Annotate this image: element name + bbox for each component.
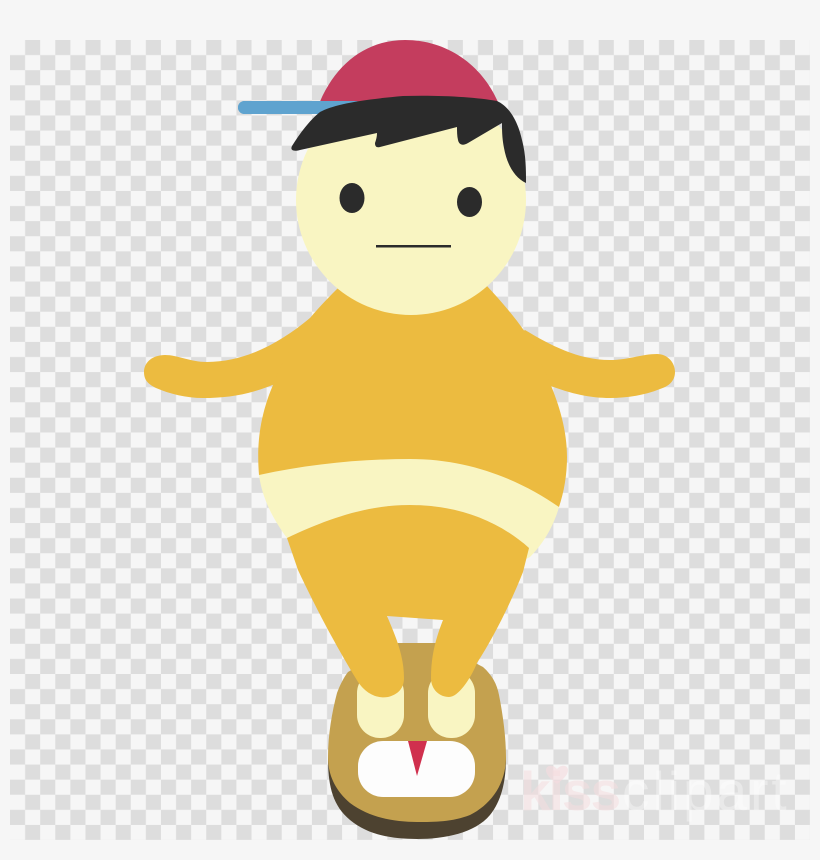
scale dial	[358, 741, 475, 797]
belt	[259, 459, 559, 560]
right eye	[457, 187, 482, 217]
head	[296, 85, 526, 315]
scale base shadow	[328, 757, 506, 839]
watermark: clipart: clipart	[622, 760, 790, 822]
left arm	[144, 318, 320, 398]
hair	[291, 96, 526, 183]
torso	[258, 286, 567, 507]
right arm	[510, 330, 675, 398]
right foot	[428, 670, 475, 738]
scale top	[328, 643, 506, 822]
scale	[328, 643, 506, 839]
mouth	[376, 245, 451, 248]
cap visor	[238, 101, 368, 114]
visor front	[238, 101, 358, 114]
left eye	[340, 183, 364, 213]
watermark: heart	[546, 766, 568, 784]
watermark: kiss: kiss	[520, 760, 619, 822]
scale needle	[408, 741, 427, 776]
legs	[287, 505, 529, 697]
watermark	[520, 760, 790, 822]
left foot	[357, 670, 404, 738]
cap dome	[320, 40, 498, 104]
